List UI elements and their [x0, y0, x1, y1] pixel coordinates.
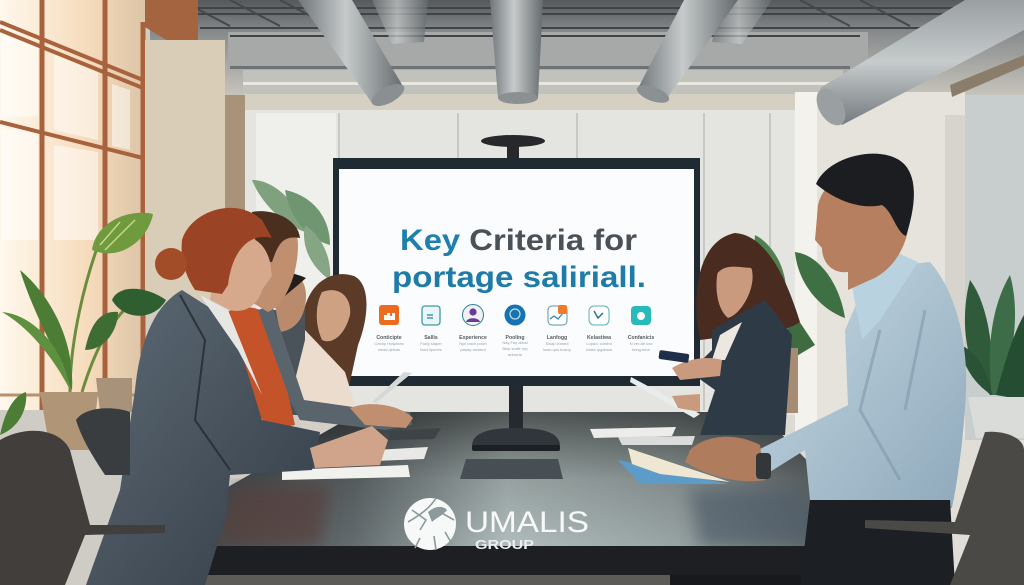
right column and glass: [795, 92, 1024, 440]
ceiling: [150, 0, 1024, 110]
person: right man in blue shirt: [685, 154, 966, 585]
window wall: [0, 0, 145, 420]
table front edge: [124, 546, 891, 575]
criteria descriptions: Fawy slaper: [420, 341, 442, 346]
right plant: [960, 275, 1024, 438]
screen heading: [392, 224, 646, 294]
papers and notebooks: [282, 427, 730, 484]
criteria labels: Lanfogg: [547, 335, 567, 341]
criteria descriptions: N ver-de low: [630, 341, 652, 346]
criteria descriptions: Cheap Hospices: [374, 341, 404, 346]
criteria descriptions: lawn qus hosny: [543, 347, 571, 352]
ceiling camera: [481, 135, 545, 160]
left plant: [0, 213, 166, 450]
icon: line graph: [548, 305, 567, 325]
criteria icon row: [379, 304, 651, 326]
table reflections: [215, 485, 850, 546]
criteria descriptions: anbwrie: [508, 352, 523, 357]
criteria descriptions: Lopad, conthd: [586, 341, 612, 346]
criteria descriptions: hong-tene: [632, 347, 651, 352]
person: man in orange shirt: [222, 211, 413, 430]
criteria descriptions: Belp smile rep: [502, 346, 528, 351]
office chairs: [0, 408, 1024, 585]
criteria labels: Confanicis: [628, 335, 654, 341]
criteria labels: Pooling: [505, 335, 525, 341]
back right planter: [784, 348, 798, 413]
icon: tree badge: [504, 304, 526, 326]
criteria descriptions: lead lipones: [420, 347, 442, 352]
criteria descriptions: Swap loosed: [546, 341, 568, 346]
criteria descriptions: wead qeicas: [378, 347, 400, 352]
criteria labels: [376, 335, 654, 341]
person: background man in suit: [268, 271, 306, 415]
criteria descriptions: Nay Fay alfosi: [502, 340, 528, 345]
criteria descriptions: [374, 340, 652, 357]
criteria labels: Conticipte: [376, 335, 402, 341]
logo globe: [404, 498, 456, 550]
person: woman in gray blazer: [86, 208, 388, 585]
ventilation ducts: [298, 0, 1024, 130]
screen display: [339, 169, 694, 376]
logo subtitle: GROUP: [475, 538, 534, 552]
presentation screen: [333, 158, 700, 386]
window pillar: [145, 40, 225, 300]
back plants: [252, 180, 845, 360]
head: [815, 170, 909, 290]
tablet on table: [460, 459, 563, 479]
icon: network: [589, 306, 609, 325]
criteria descriptions: make qigahwa: [586, 347, 613, 352]
conference table: [124, 412, 891, 585]
criteria descriptions: Nye bach pown: [459, 341, 487, 346]
pillar shadow: [225, 95, 245, 300]
logo wordmark: UMALIS: [465, 506, 589, 539]
screen heading: portage saliriall.: [392, 261, 646, 294]
screen frame: [333, 158, 700, 386]
person: standing woman with phone: [630, 233, 800, 435]
wood beam: [100, 0, 198, 53]
criteria labels: Sallis: [424, 335, 438, 341]
screen heading: Key Criteria for: [400, 224, 638, 257]
criteria labels: Experience: [459, 335, 487, 341]
icon: teal badge: [631, 306, 651, 325]
icon: person: [462, 304, 484, 326]
icon: document: [422, 306, 440, 325]
floor: [0, 410, 300, 585]
criteria labels: Kelastiwa: [587, 335, 611, 341]
person: background woman blonde: [282, 274, 366, 408]
screen stand: [472, 386, 560, 451]
icon: orange chart: [379, 305, 399, 325]
criteria descriptions: pawsy anwerd: [460, 347, 486, 352]
umalis group logo: [404, 498, 589, 552]
table top: [124, 412, 890, 546]
hands and watch: [685, 437, 765, 481]
back panel wall: [245, 110, 795, 415]
